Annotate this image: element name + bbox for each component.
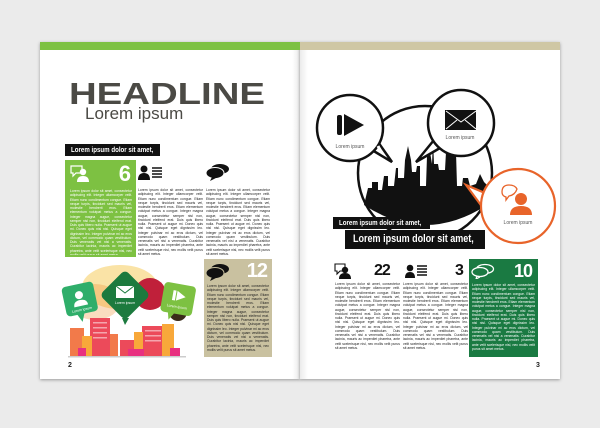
icon: person chat [334, 264, 351, 279]
panel: beige box: Lorem ipsum dolor sit amet, consectetur adipiscing elit. Integer ullamcorper velit. Etiam nunc condimentum congue. Etiam neque turpis, tincidunt sed mauris vel, molestie hendrerit eros. Etiam elementum volutpat metus a congue. Integer magna augue, consectetur semper nisl non, tincidunt eleifend erat. Duis quis libero nulla. Praesent ut augue mi. Donec quis nisl nisl. Quisque eget dignissim leo. Integer pulvinar mi ac eros dictum, vel commodo quam vestibulum. Duis venenatis vel nisi a venenatis. Curabitur lacinia, mauris ac imperdiet pharetra, ante velit scelerisque nisl, nec mollis velit purus sit amet metus. [207, 284, 269, 352]
green top bar [40, 42, 300, 50]
dark green diamond [100, 270, 150, 320]
illustration: colorful city with bubbles: Lorem ipsum [115, 301, 135, 305]
right page [300, 42, 560, 379]
panel: green box: Lorem ipsum dolor sit amet, consectetur adipiscing elit. Integer ullamcorper velit. Etiam nunc condimentum congue. Etiam neque turpis, tincidunt sed mauris vel, molestie hendrerit eros. Etiam elementum volutpat metus a congue. Integer magna augue, consectetur semper nisl non, tincidunt eleifend erat. Duis quis libero nulla. Praesent ut augue mi. Donec quis nisl nisl. Quisque eget dignissim leo. Integer pulvinar mi ac eros dictum, vel commodo quam vestibulum. Duis venenatis vel nisi a venenatis. Curabitur lacinia, mauris ac imperdiet pharetra, ante velit scelerisque nisl, nec mollis velit purus sit amet metus. [70, 189, 132, 255]
panel: green box [65, 160, 136, 257]
beige top bar [300, 42, 560, 50]
label left: Lorem ipsum dolor sit amet, [71, 145, 153, 154]
label right 1 [333, 217, 430, 229]
illustration: circle city with bubbles [316, 88, 556, 244]
icon: chat bubbles [206, 164, 229, 181]
label left [65, 144, 160, 156]
illustration: colorful city with bubbles [62, 265, 196, 358]
page number 2: 2 [68, 362, 72, 369]
mail bubble: Lorem ipsum [446, 135, 474, 141]
panel: dark green box: Lorem ipsum dolor sit amet, consectetur adipiscing elit. Integer ullamcorper velit. Etiam nunc condimentum congue. Etiam neque turpis, tincidunt sed mauris vel, molestie hendrerit eros. Etiam elementum volutpat metus a congue. Integer magna augue, consectetur semper nisl non, tincidunt eleifend erat. Duis quis libero nulla. Praesent ut augue mi. Donec quis nisl nisl. Quisque eget dignissim leo. Integer pulvinar mi ac eros dictum, vel commodo quam vestibulum. Duis venenatis vel nisi a venenatis. Curabitur lacinia, mauris ac imperdiet pharetra, ante velit scelerisque nisl, nec mollis velit purus sit amet metus. [472, 283, 535, 351]
teal bubble [61, 281, 100, 325]
page fold shadow [292, 50, 308, 379]
subheadline: Lorem ipsum [85, 104, 183, 123]
light green bubble: Lorem ipsum [166, 303, 187, 311]
main circle [358, 106, 492, 240]
mail bubble [416, 90, 494, 162]
panel: beige box [204, 259, 272, 357]
panel: dark green box [469, 259, 538, 357]
number 3: 3 [455, 262, 463, 279]
number 22: 22 [374, 262, 390, 279]
play bubble [317, 95, 392, 162]
play bubble: Lorem ipsum [336, 144, 364, 150]
label right 2 [345, 230, 485, 249]
label right 1: Lorem ipsum dolor sit amet, [339, 218, 421, 227]
number 10: 10 [514, 261, 532, 281]
text column right 2: Lorem ipsum dolor sit amet, consectetur adipiscing elit. Integer ullamcorper velit. Etiam nunc condimentum congue. Etiam neque turpis, tincidunt sed mauris vel, molestie hendrerit eros. Etiam elementum volutpat metus a congue. Integer magna augue, consectetur semper nisl non, tincidunt eleifend erat. Duis quis libero nulla. Praesent ut augue mi. Donec quis nisl nisl. Quisque eget dignissim leo. Integer pulvinar mi ac eros dictum, vel commodo quam vestibulum. Duis venenatis vel nisi a venenatis. Curabitur lacinia, mauris ac imperdiet pharetra, ante velit scelerisque nisl, nec mollis velit purus sit amet metus. [403, 282, 468, 350]
text column 2: Lorem ipsum dolor sit amet, consectetur adipiscing elit. Integer ullamcorper velit. Etiam nunc condimentum congue. Etiam neque turpis, tincidunt sed mauris vel, molestie hendrerit eros. Etiam elementum volutpat metus a congue. Integer magna augue, consectetur semper nisl non, tincidunt eleifend erat. Duis quis libero nulla. Praesent ut augue mi. Donec quis nisl nisl. Quisque eget dignissim leo. Integer pulvinar mi ac eros dictum, vel commodo quam vestibulum. Duis venenatis vel nisi a venenatis. Curabitur lacinia, mauris ac imperdiet pharetra, ante velit scelerisque nisl, nec mollis velit purus sit amet metus. [138, 188, 203, 256]
icon: chat bubbles [206, 264, 229, 281]
icon: chat bubbles outline [471, 264, 494, 279]
orange bubble [466, 169, 555, 243]
orange bubble: Lorem ipsum [504, 220, 532, 226]
icon: person bubble [70, 165, 89, 182]
text column 3: Lorem ipsum dolor sit amet, consectetur adipiscing elit. Integer ullamcorper velit. Etiam nunc condimentum congue. Etiam neque turpis, tincidunt sed mauris vel, molestie hendrerit eros. Etiam elementum volutpat metus a congue. Integer magna augue, consectetur semper nisl non, tincidunt eleifend erat. Duis quis libero nulla. Praesent ut augue mi. Donec quis nisl nisl. Quisque eget dignissim leo. Integer pulvinar mi ac eros dictum, vel commodo quam vestibulum. Duis venenatis vel nisi a venenatis. Curabitur lacinia, mauris ac imperdiet pharetra, ante velit scelerisque nisl, nec mollis velit purus sit amet metus. [206, 188, 270, 256]
label right 2: Lorem ipsum dolor sit amet, [353, 233, 474, 245]
number 6: 6 [119, 161, 130, 186]
teal bubble: Lorem ipsum [72, 306, 92, 314]
icon: person list [405, 264, 427, 278]
number 12: 12 [247, 260, 267, 282]
left page [40, 42, 300, 379]
page number 3: 3 [536, 362, 540, 369]
light green bubble [159, 281, 197, 323]
text column right 1: Lorem ipsum dolor sit amet, consectetur adipiscing elit. Integer ullamcorper velit. Etiam nunc condimentum congue. Etiam neque turpis, tincidunt sed mauris vel, molestie hendrerit eros. Etiam elementum volutpat metus a congue. Integer magna augue, consectetur semper nisl non, tincidunt eleifend erat. Duis quis libero nulla. Praesent ut augue mi. Donec quis nisl nisl. Quisque eget dignissim leo. Integer pulvinar mi ac eros dictum, vel commodo quam vestibulum. Duis venenatis vel nisi a venenatis. Curabitur lacinia, mauris ac imperdiet pharetra, ante velit scelerisque nisl, nec mollis velit purus sit amet metus. [335, 282, 400, 350]
icon: person list [138, 166, 162, 180]
